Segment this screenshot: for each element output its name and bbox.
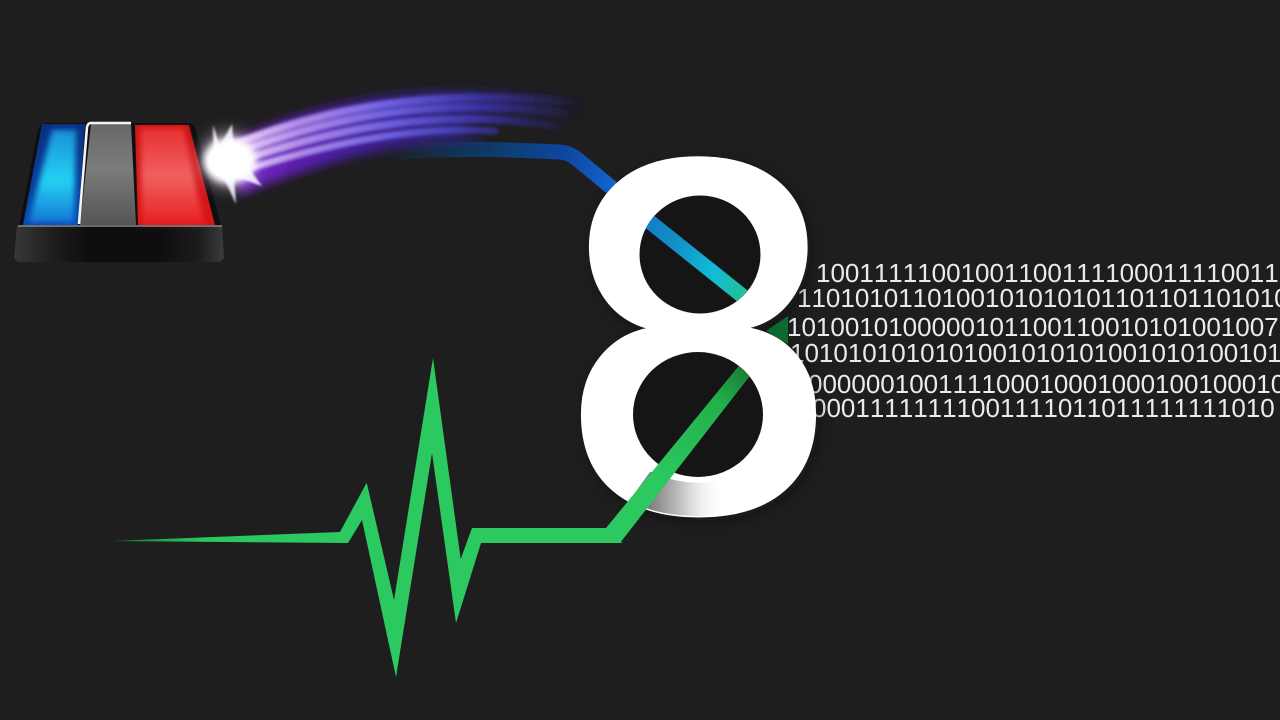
rising green segment xyxy=(606,362,756,543)
dark upper counter of the 8 xyxy=(640,196,760,314)
binary digit stream: 100111110010011001111000111100111 xyxy=(816,258,1280,288)
device base xyxy=(14,226,224,262)
blue signal line behind the 8 xyxy=(390,149,745,298)
grey panel xyxy=(80,124,136,225)
dark green line end in the notch of the 8 xyxy=(766,316,788,344)
signal line inside upper counter xyxy=(646,216,748,301)
large white numeral 8: 8 xyxy=(561,54,836,619)
white highlight on grey panel xyxy=(79,123,131,224)
white body of the 8 around its counters xyxy=(616,182,780,492)
device body xyxy=(19,123,221,226)
binary digit stream: 10100101000001011001100101010010071 xyxy=(787,312,1280,342)
beam streaks xyxy=(225,98,580,176)
base rim highlight xyxy=(18,225,222,227)
green heartbeat line xyxy=(112,358,756,677)
white light burst xyxy=(204,124,262,204)
beam glow xyxy=(222,90,585,194)
blue panel xyxy=(23,124,85,225)
cyan panel highlight xyxy=(29,130,76,222)
purple light beam xyxy=(222,90,585,194)
flag-coloured device xyxy=(14,123,224,262)
binary digit stream: 1101010110100101010101101101101010 xyxy=(797,283,1280,313)
dark lower counter of the 8 xyxy=(633,352,763,477)
grey shadow on the base of the 8 xyxy=(635,472,708,516)
red panel xyxy=(135,125,215,225)
light red panel highlight xyxy=(140,128,204,224)
burst spikes xyxy=(213,124,262,204)
shadow around the figure 8: 8 xyxy=(564,58,840,623)
binary digit stream: 00011111111001111011011111111010 xyxy=(812,393,1275,423)
binary digit stream xyxy=(787,258,1280,423)
